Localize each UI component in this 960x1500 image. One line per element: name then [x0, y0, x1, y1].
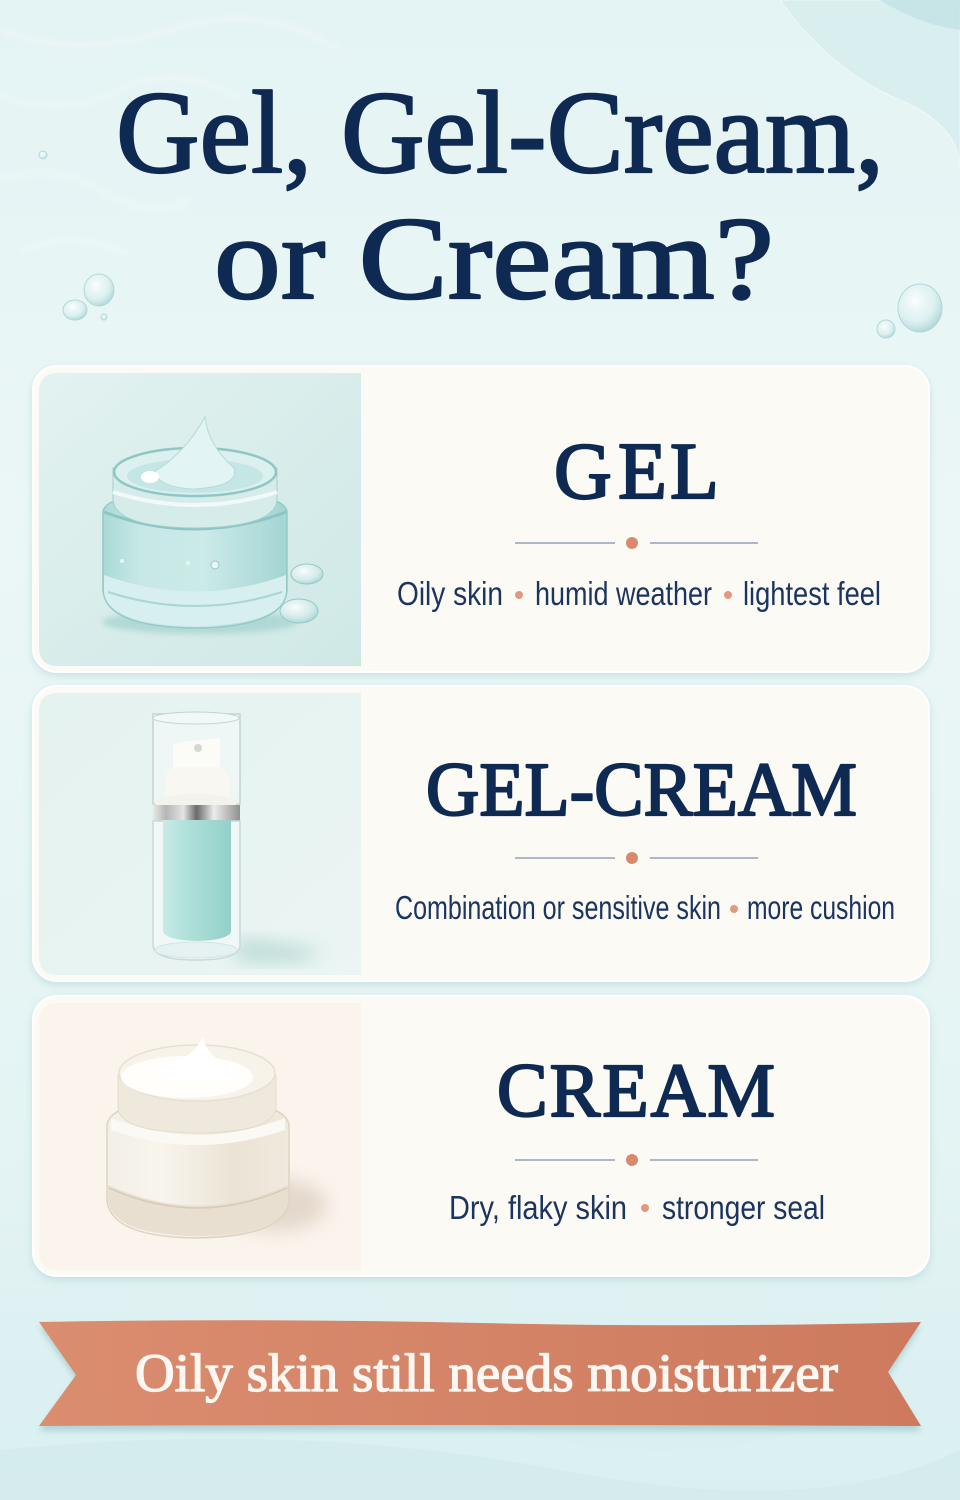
heading: cream: CREAM	[497, 1049, 775, 1133]
gel traits: Oily skin	[397, 575, 503, 612]
divider	[515, 1154, 758, 1166]
banner text: Oily skin still needs moisturizer	[135, 1343, 838, 1403]
gel traits: lightest feel	[743, 575, 881, 612]
divider	[515, 852, 758, 864]
gel traits: humid weather	[535, 575, 712, 612]
title: or Cream?	[214, 193, 774, 324]
gel image background	[39, 373, 361, 666]
icon: drops	[280, 564, 323, 623]
cream image background	[39, 1003, 361, 1270]
gel traits	[397, 575, 881, 612]
title: Gel, Gel-Cream,	[116, 67, 884, 198]
gel-cream image background	[39, 693, 361, 975]
gel-cream traits: more cushion	[747, 889, 895, 926]
cream traits: stronger seal	[662, 1189, 825, 1226]
cream traits	[449, 1189, 825, 1226]
icon: pump bottle	[153, 712, 325, 962]
panel: gel	[33, 366, 929, 672]
heading: gel: GEL	[554, 428, 719, 516]
icon: gel jar	[102, 417, 323, 634]
panel: cream	[33, 996, 929, 1276]
icon: cream jar	[107, 1037, 327, 1238]
water droplets	[39, 151, 942, 338]
divider	[515, 537, 758, 549]
heading: gel-cream: GEL-CREAM	[426, 748, 857, 832]
cream traits: Dry, flaky skin	[449, 1189, 627, 1226]
panel: gel-cream	[33, 686, 929, 981]
gel-cream traits: Combination or sensitive skin	[395, 889, 721, 926]
title	[116, 67, 884, 324]
banner	[39, 1320, 921, 1431]
